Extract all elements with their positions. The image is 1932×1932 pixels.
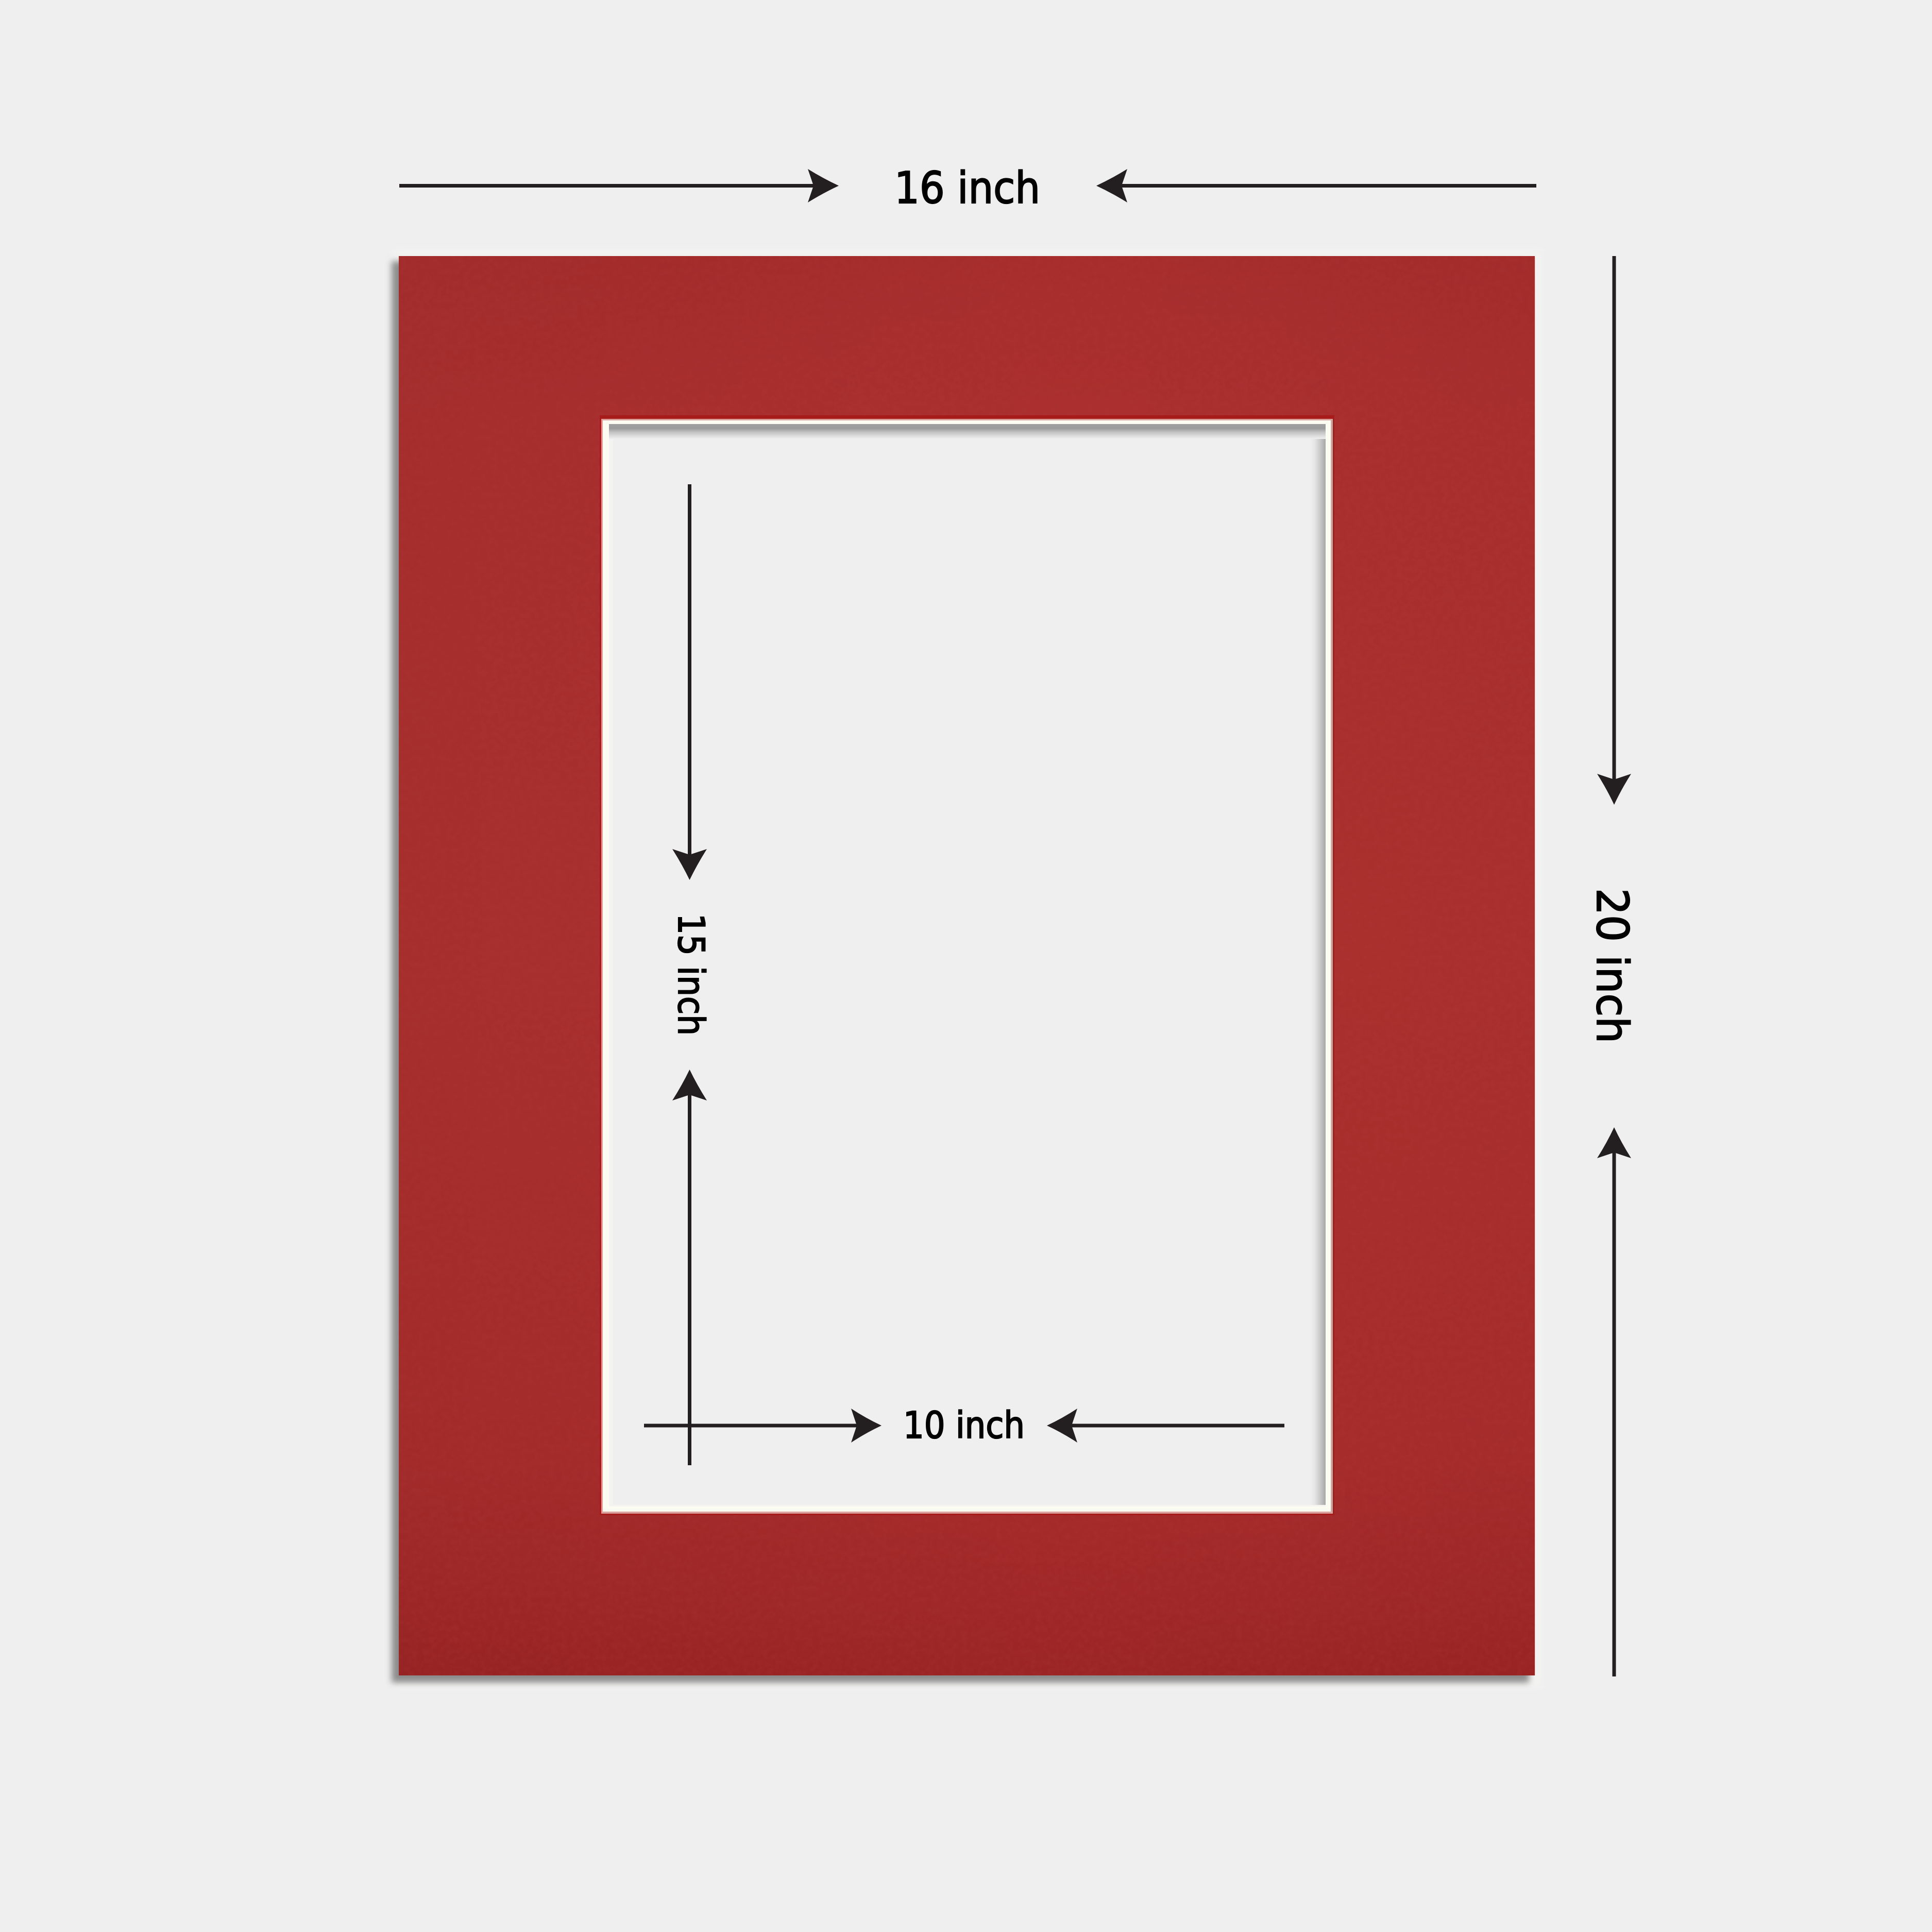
label: 16 inch: 16 inch — [894, 163, 1040, 214]
arrow: outer width, left — [399, 169, 839, 202]
arrow: outer height, bottom — [1597, 1127, 1631, 1676]
label: 20 inch: 20 inch — [1586, 888, 1637, 1043]
label: 15 inch: 15 inch — [670, 913, 712, 1036]
arrow: inner height, top — [672, 484, 707, 880]
arrow: outer width, right — [1096, 169, 1536, 202]
label: 10 inch: 10 inch — [903, 1404, 1025, 1447]
panel: red mat board — [392, 250, 1541, 1687]
arrow: inner height, bottom — [672, 1070, 707, 1465]
arrow: inner width, right — [1047, 1409, 1284, 1443]
window opening with cream bevel — [600, 415, 1334, 1515]
arrow: inner width, left — [644, 1409, 882, 1443]
arrow: outer height, top — [1597, 256, 1631, 805]
